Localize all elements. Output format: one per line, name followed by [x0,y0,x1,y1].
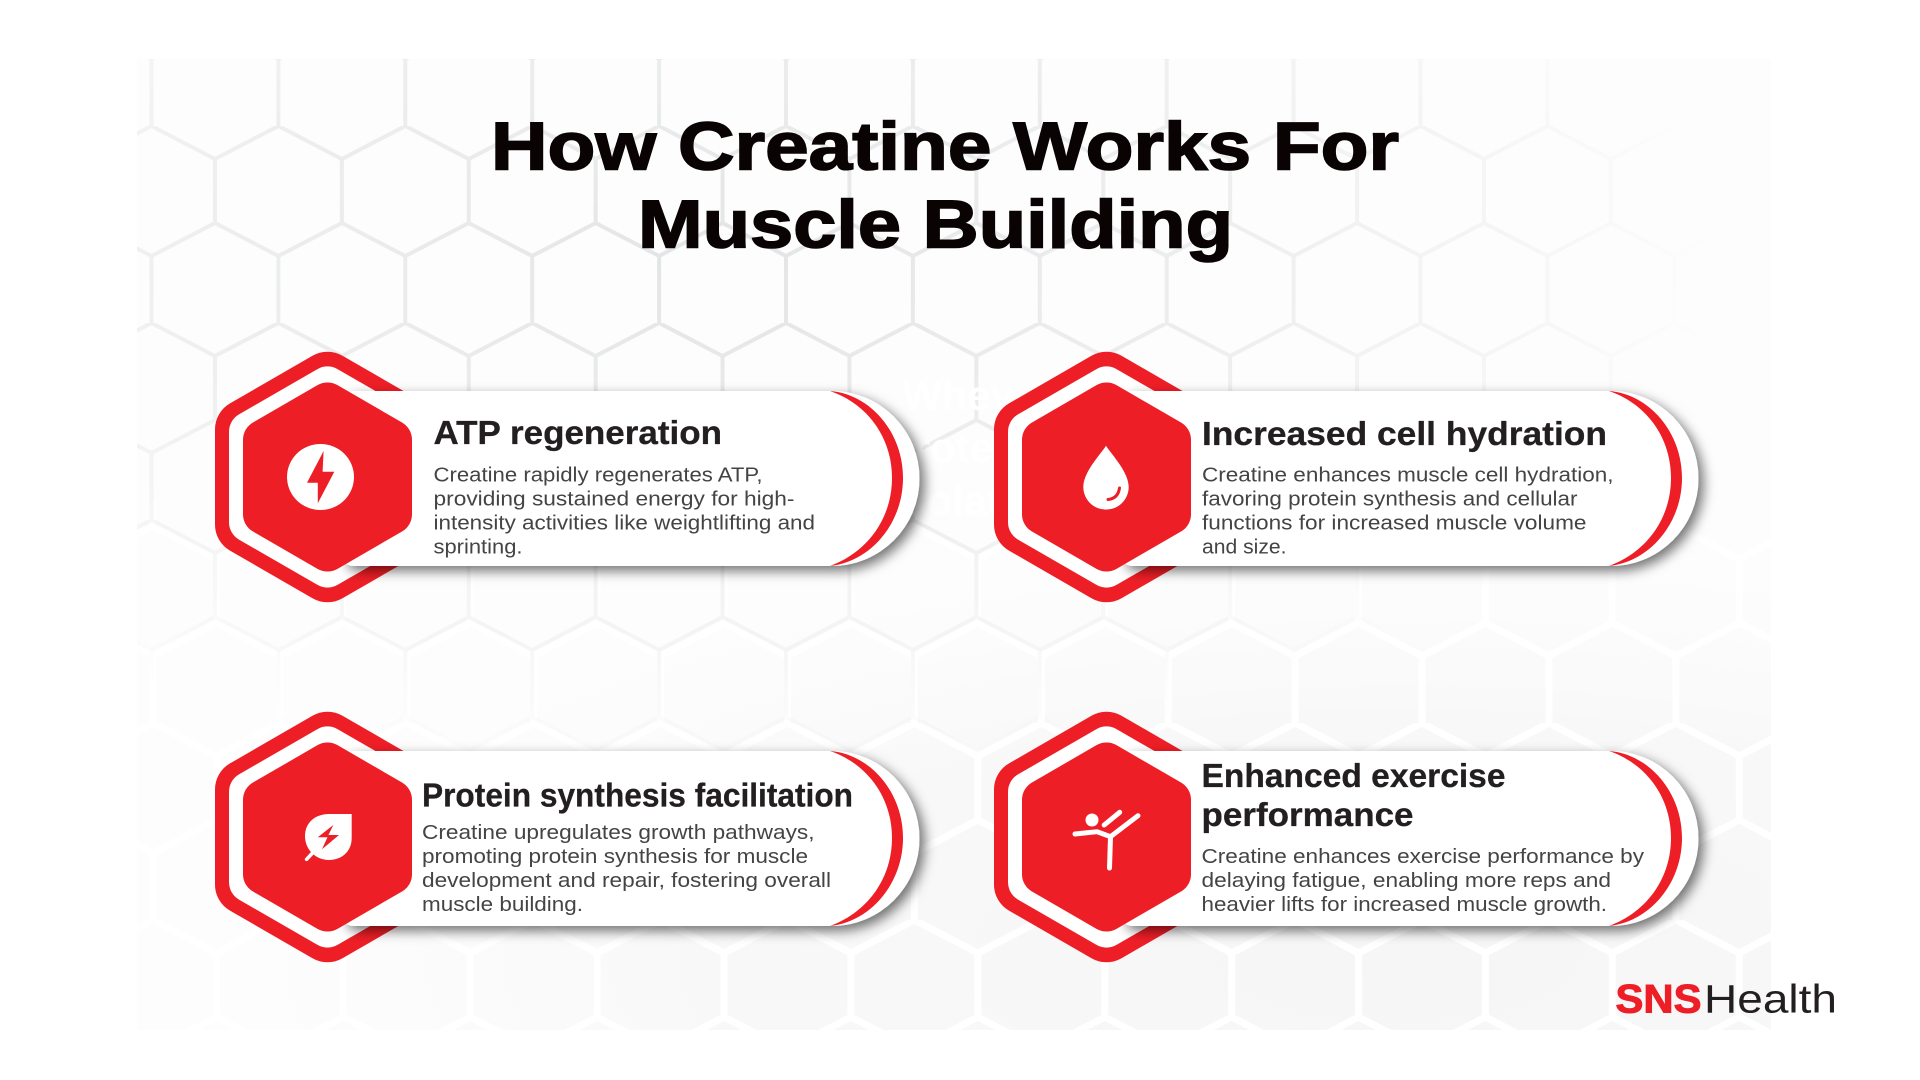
panel: Protein synthesis facilitation [245,742,920,932]
icon: leaf with bolt [305,814,352,860]
text block: hydration description: favoring protein synthesis and cellular [1202,488,1578,510]
card shape: hexagon and pill [245,382,920,572]
logo: SNSHealth [1616,977,1837,1021]
heading: Protein synthesis facilitation: Protein synthesis facilitation [422,776,853,814]
panel: ATP regeneration [245,382,920,572]
text block: protein description: muscle building. [422,893,583,916]
card shape: hexagon and pill [245,742,920,932]
heading: Increased cell hydration: Increased cell hydration [1202,415,1607,452]
text block: ATP description: sprinting. [434,536,522,558]
heading: ATP regeneration: ATP regeneration [434,414,722,451]
icon: athlete kicking [1075,812,1138,868]
background: hexagon pattern panel [137,59,1771,1030]
panel: Enhanced exercise performance [1024,742,1698,932]
text block: exercise description [1202,845,1645,916]
text block: hydration description [1202,464,1614,558]
heading: Enhanced exercise performance: Enhanced exercise [1202,757,1506,794]
card shape: hexagon and pill [1024,742,1698,932]
panel: Increased cell hydration [1024,382,1698,572]
text block: ATP description: providing sustained energy for high- [434,488,794,510]
text block: protein description: development and repair, fostering overall [422,869,831,892]
faint background text [886,372,1030,524]
text block: ATP description: Creatine rapidly regenerates ATP, [434,464,762,486]
faint background text: Whey [902,372,1015,419]
faint background text: Protein [886,424,1030,471]
text block: hydration description: and size. [1202,536,1286,558]
text block: protein description: Creatine upregulates growth pathways, [422,821,814,844]
text block: ATP description [434,464,815,558]
title: How Creatine Works For [491,108,1399,184]
logo: SNSHealth: Health [1704,977,1837,1021]
icon: water drop [1083,446,1129,510]
text block: exercise description: heavier lifts for increased muscle growth. [1202,893,1607,916]
faint background text: Isolate [891,477,1025,524]
text block: ATP description: intensity activities like weightlifting and [434,512,815,534]
text block: exercise description: Creatine enhances exercise performance by [1202,845,1645,868]
heading: Enhanced exercise performance [1202,757,1506,833]
logo: SNSHealth: SNS [1616,977,1702,1021]
text block: exercise description: delaying fatigue, enabling more reps and [1202,869,1611,892]
heading: Enhanced exercise performance: performance [1202,796,1414,833]
card shape: hexagon and pill [1024,382,1698,572]
text block: hydration description: Creatine enhances muscle cell hydration, [1202,464,1614,486]
title [491,108,1399,262]
text block: protein description [422,821,831,916]
icon: lightning bolt in circle [287,444,354,510]
text block: hydration description: functions for increased muscle volume [1202,512,1586,534]
text block: protein description: promoting protein synthesis for muscle [422,845,808,868]
title: Muscle Building [638,186,1233,262]
